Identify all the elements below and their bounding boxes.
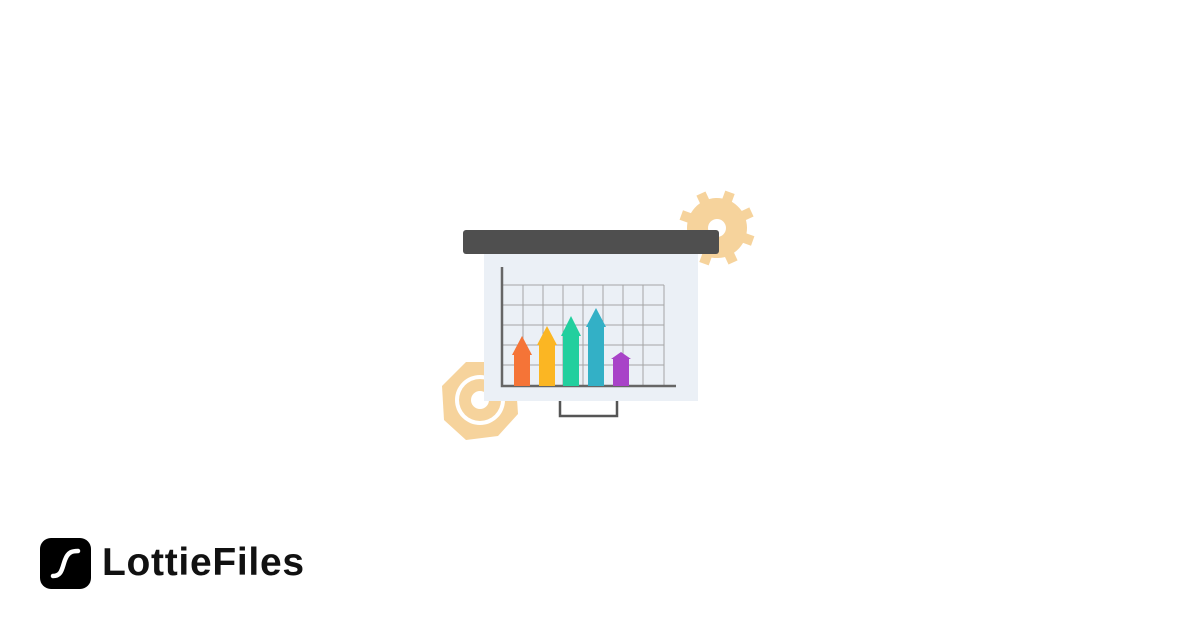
icon: gear top-right (668, 179, 766, 277)
bars (512, 308, 631, 386)
grid (503, 285, 664, 386)
logo text: LottieFiles (102, 541, 305, 584)
axes (502, 267, 676, 386)
icon: logo mark (40, 538, 91, 589)
logo (40, 538, 305, 589)
icon: gear bottom-left (442, 362, 518, 440)
top bar (463, 230, 719, 254)
handle (560, 401, 617, 416)
screen (484, 250, 698, 401)
